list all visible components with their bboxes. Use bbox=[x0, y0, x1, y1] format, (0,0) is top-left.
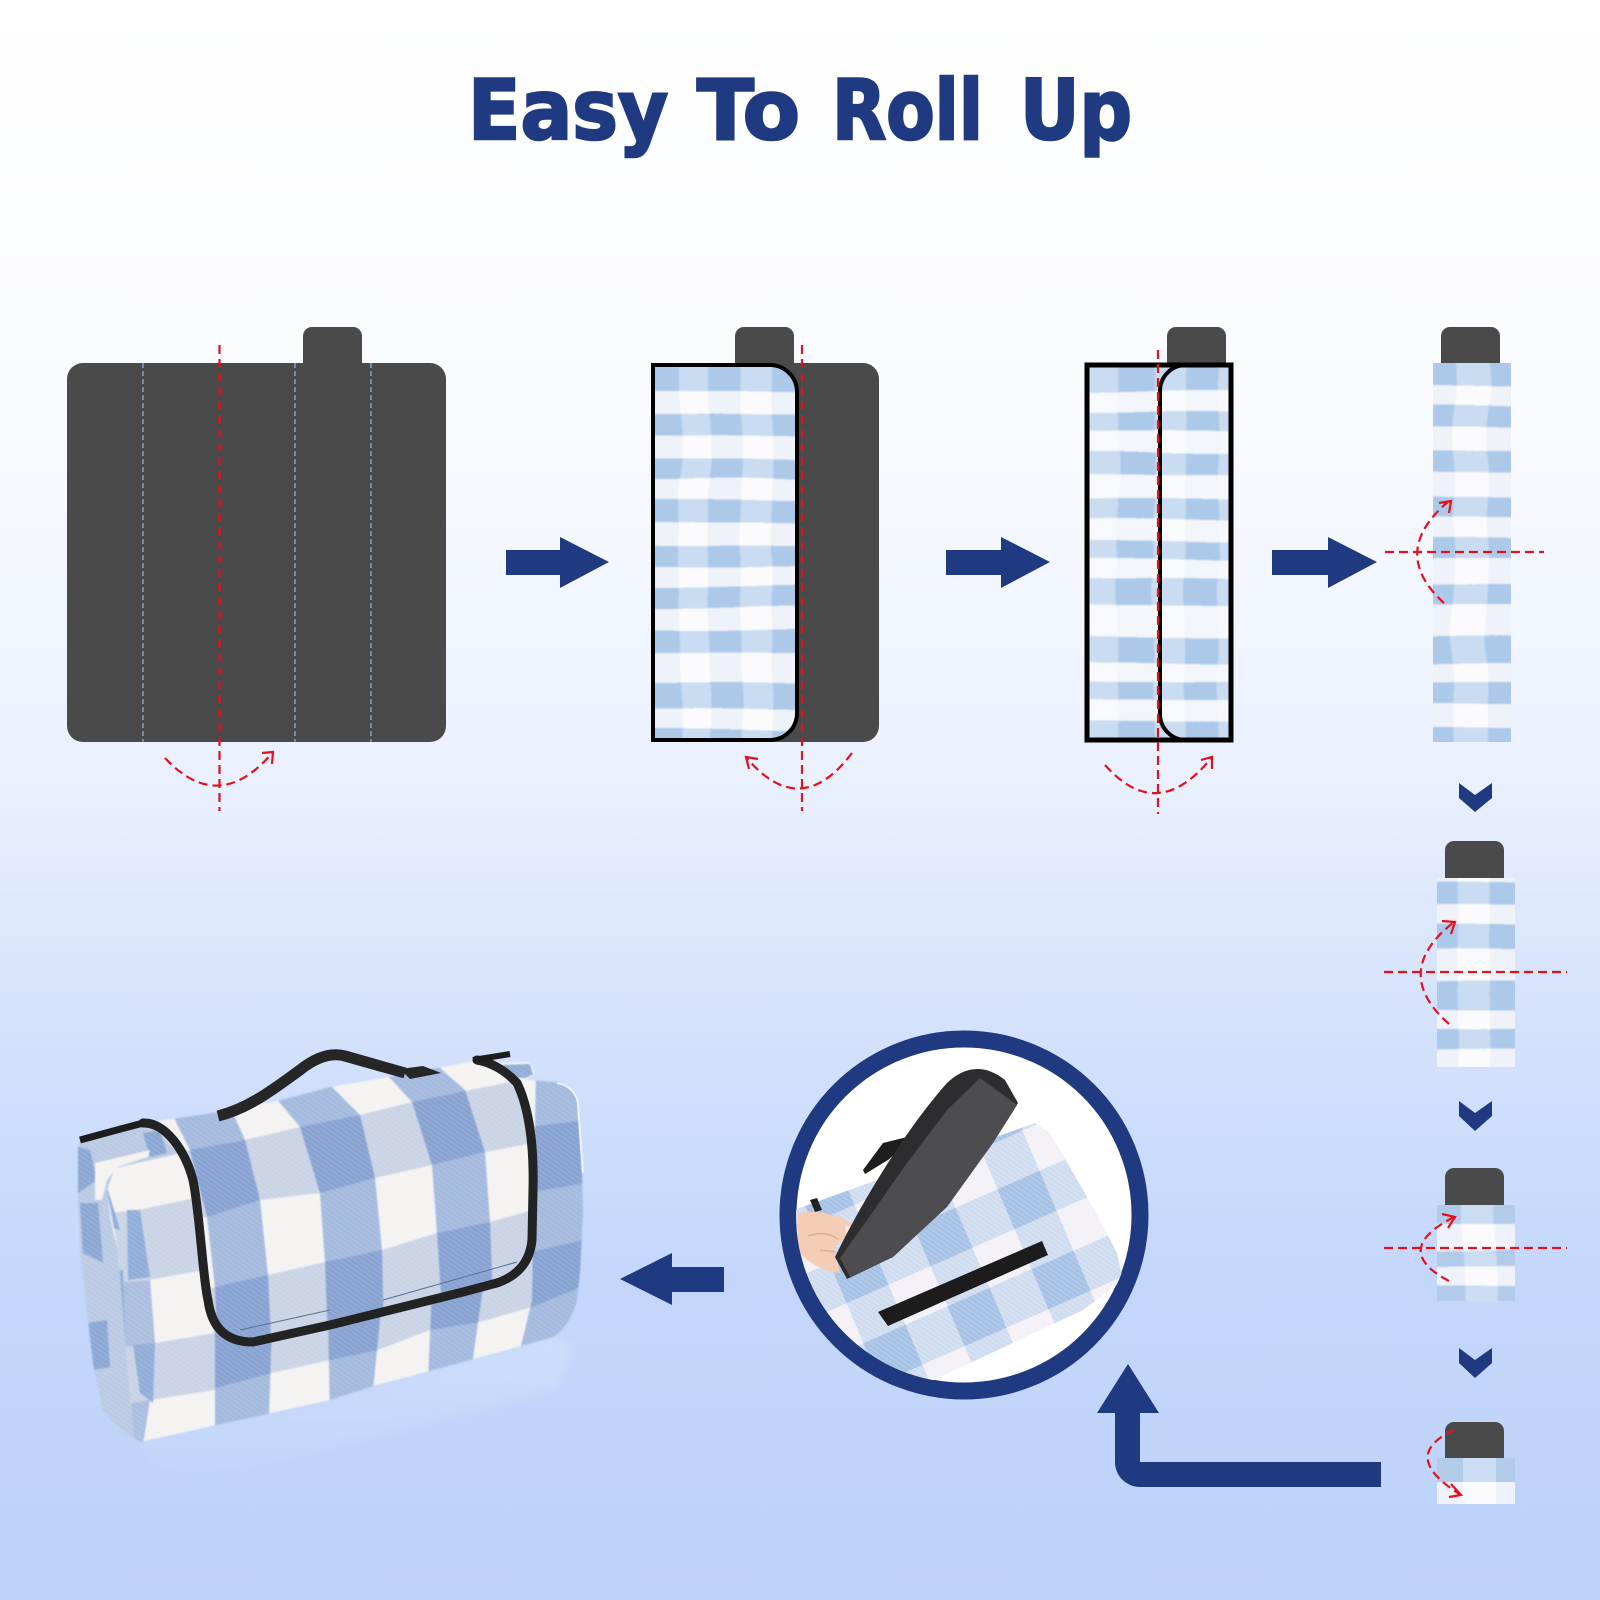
step 7: smallest roll bbox=[1428, 1422, 1515, 1504]
white lip strip bbox=[95, 1150, 150, 1200]
left outer dark patches bbox=[78, 1130, 167, 1370]
L-shaped arrow up to circle bbox=[1097, 1364, 1381, 1487]
twill texture bbox=[78, 1064, 582, 1441]
step 1: unfolded mat bbox=[67, 327, 446, 811]
step 5: folded strip bbox=[1384, 841, 1567, 1085]
chevron 1 bbox=[1459, 783, 1492, 812]
step 3: second fold bbox=[1084, 327, 1234, 814]
chevron 2 bbox=[1459, 1101, 1492, 1131]
strap bbox=[863, 1138, 905, 1174]
reflection bbox=[140, 1336, 572, 1492]
front lip face bbox=[107, 1154, 216, 1442]
velcro strip bbox=[878, 1241, 1048, 1326]
arrow 1 bbox=[506, 537, 609, 588]
arrow to final product bbox=[620, 1253, 724, 1305]
title: Roll bbox=[832, 62, 983, 159]
step 2: first fold bbox=[630, 327, 879, 811]
flap layer bbox=[174, 1067, 528, 1334]
step 4: long strip bbox=[1385, 327, 1544, 760]
underside inner face bbox=[840, 1078, 1017, 1277]
folded dark underside of mat bbox=[835, 1069, 1018, 1279]
flap black binding bbox=[143, 1060, 533, 1342]
left outer roll bbox=[77, 1127, 178, 1440]
carrying handle bbox=[218, 1055, 441, 1116]
small top fold bbox=[500, 1064, 533, 1078]
arrow 3 bbox=[1272, 537, 1377, 588]
hand bbox=[798, 1212, 858, 1273]
top right binding end bbox=[473, 1054, 510, 1060]
title: Easy bbox=[468, 62, 668, 159]
left binding end bbox=[80, 1123, 143, 1140]
stitching bbox=[240, 1262, 517, 1330]
chevron 3 bbox=[1459, 1348, 1492, 1378]
right and lower body rows bbox=[214, 1120, 582, 1388]
small edge binding bbox=[810, 1198, 822, 1212]
circle detail: velcro fastening bbox=[780, 1039, 1140, 1400]
right light rim bbox=[557, 1083, 583, 1173]
title: To bbox=[697, 62, 800, 159]
blanket fabric bbox=[77, 1062, 584, 1442]
step 6: shorter strip bbox=[1384, 1168, 1567, 1301]
final rolled picnic blanket bbox=[77, 1049, 584, 1442]
title: Up bbox=[1020, 62, 1132, 159]
arrow 2 bbox=[946, 537, 1050, 588]
right and lower body columns bbox=[213, 1080, 584, 1426]
